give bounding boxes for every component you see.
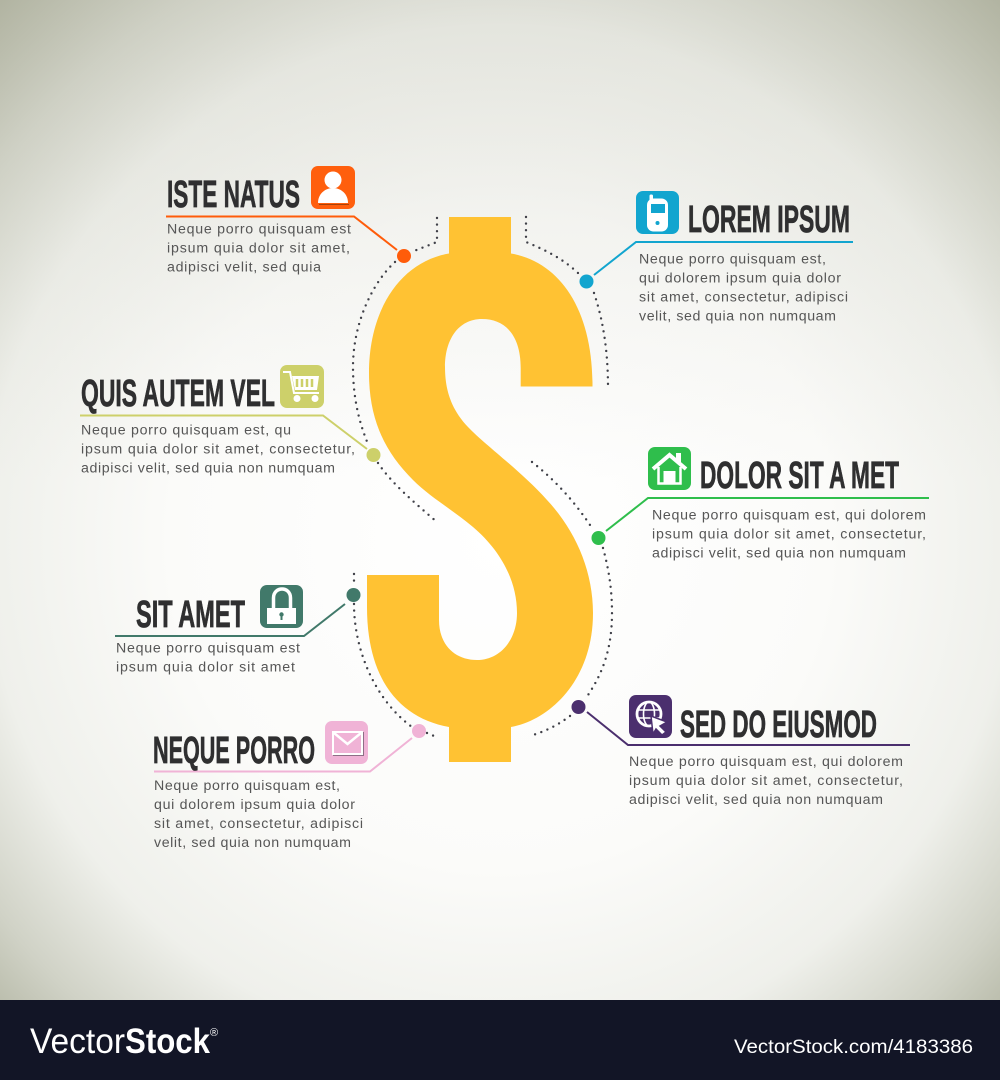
panel: lorem ipsum [580, 191, 853, 324]
heading: QUIS AUTEM VEL [81, 373, 275, 415]
panel: sit amet [115, 585, 360, 676]
description: Neque porro quisquam est [116, 640, 300, 656]
description [81, 422, 355, 476]
description: Neque porro quisquam est, [639, 252, 826, 268]
description: Neque porro quisquam est, qui dolorem [652, 508, 926, 524]
footer logo: VectorStock [30, 1022, 210, 1061]
description [652, 508, 926, 562]
marker dot [346, 588, 360, 602]
connector line [606, 498, 929, 531]
connector line [594, 242, 853, 275]
description: adipisci velit, sed quia non numquam [652, 546, 906, 562]
connector line [587, 712, 910, 745]
description: Neque porro quisquam est, qu [81, 422, 291, 438]
description: ipsum quia dolor sit amet, consectetur, [629, 773, 903, 789]
heading: ISTE NATUS [167, 174, 300, 216]
registered mark: ® [210, 1027, 218, 1039]
marker dot [366, 448, 380, 462]
marker dot [397, 249, 411, 263]
marker dot [572, 700, 586, 714]
description [167, 222, 351, 276]
description [629, 754, 903, 808]
description: ipsum quia dolor sit amet, [167, 240, 350, 256]
connector line [154, 738, 412, 772]
icon: globe with cursor [629, 695, 672, 738]
description [639, 252, 848, 324]
description: Neque porro quisquam est, qui dolorem [629, 754, 903, 770]
heading: NEQUE PORRO [153, 730, 315, 772]
description: adipisci velit, sed quia non numquam [629, 792, 883, 808]
description [116, 640, 300, 676]
description: velit, sed quia non numquam [639, 308, 836, 324]
footer image id: VectorStock.com/4183386 [734, 1037, 973, 1058]
description: sit amet, consectetur, adipisci [154, 816, 363, 832]
description: adipisci velit, sed quia non numquam [81, 460, 335, 476]
panel: sed do eiusmod [572, 695, 910, 808]
connector line [115, 604, 345, 636]
description: qui dolorem ipsum quia dolor [154, 797, 355, 813]
description: Neque porro quisquam est [167, 222, 351, 238]
description: ipsum quia dolor sit amet, consectetur, [81, 442, 355, 458]
heading: LOREM IPSUM [688, 199, 850, 241]
description: ipsum quia dolor sit amet, consectetur, [652, 526, 926, 542]
footer bar [0, 1000, 1000, 1080]
icon: envelope [325, 721, 368, 764]
icon: house [648, 447, 691, 490]
panel: quis autem vel [80, 365, 380, 476]
background top shade [0, 0, 1000, 480]
icon: padlock [260, 585, 303, 628]
description: Neque porro quisquam est, [154, 778, 340, 794]
icon: mobile phone [636, 191, 679, 234]
description: qui dolorem ipsum quia dolor [639, 270, 841, 286]
panel: neque porro [153, 721, 426, 851]
marker dot [580, 274, 594, 288]
icon: person [311, 166, 355, 209]
panel: iste natus [166, 166, 411, 276]
panel: dolor sit a met [592, 447, 929, 562]
heading: SIT AMET [136, 594, 245, 636]
description [154, 778, 363, 851]
description: adipisci velit, sed quia [167, 260, 321, 276]
dollar sign [367, 217, 593, 762]
connector line [80, 416, 367, 449]
dotted outline around dollar sign [353, 217, 612, 736]
marker dot [592, 531, 606, 545]
description: sit amet, consectetur, adipisci [639, 290, 848, 306]
description: velit, sed quia non numquam [154, 835, 351, 851]
description: ipsum quia dolor sit amet [116, 660, 295, 676]
marker dot [412, 724, 426, 738]
icon: shopping cart [280, 365, 324, 408]
connector line [166, 216, 397, 250]
